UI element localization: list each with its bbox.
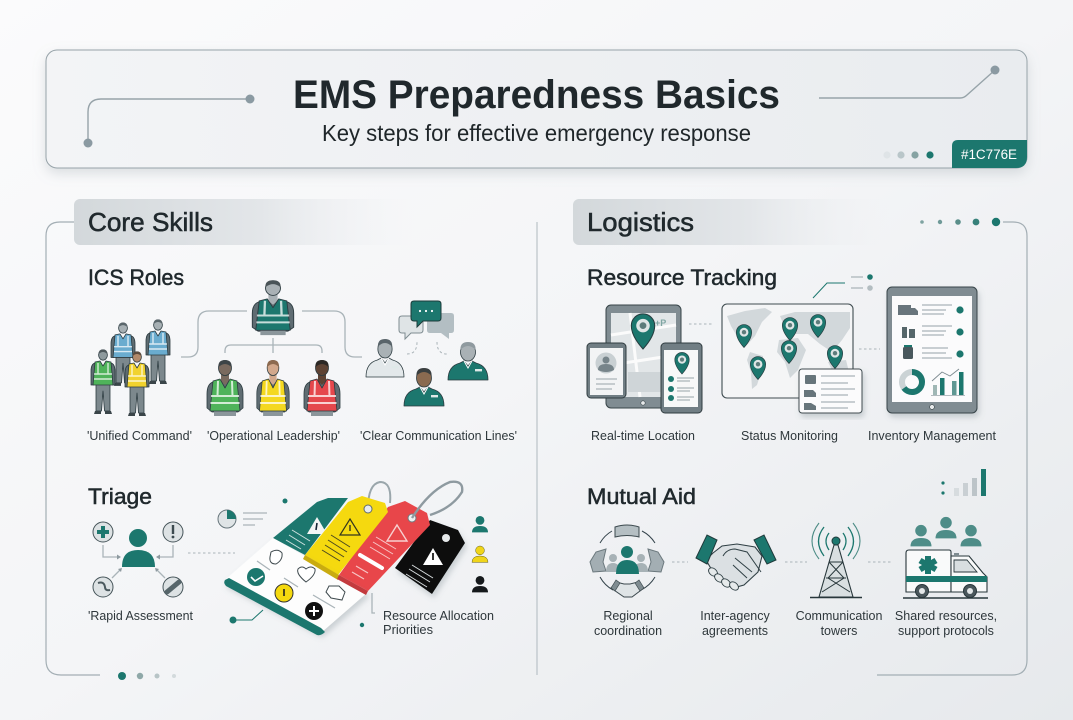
colour tag: #1C776E	[961, 147, 1017, 162]
logistics frame	[877, 222, 1027, 675]
progress dots	[920, 218, 1000, 226]
mutual aid labels: agreements	[702, 624, 768, 638]
status dots	[883, 151, 934, 159]
triage heading: Triage	[88, 484, 152, 509]
donut chart	[902, 372, 922, 392]
core skills heading: Core Skills	[88, 207, 213, 237]
mutual aid labels: Shared resources,	[895, 609, 997, 623]
ICS labels: 'Unified Command'	[87, 429, 192, 443]
inventory rows	[898, 305, 964, 359]
icon: inventory tablet	[887, 287, 977, 413]
mutual aid labels: towers	[821, 624, 857, 638]
continents	[727, 308, 850, 389]
resource labels	[591, 429, 997, 443]
dashed connector	[188, 552, 235, 554]
mutual aid labels: support protocols	[898, 624, 994, 638]
divider	[536, 222, 538, 675]
icon: mini pie with lines	[218, 498, 288, 528]
right phone	[661, 343, 702, 413]
icon: device group	[587, 305, 702, 413]
dashed connector	[868, 561, 892, 563]
header panel	[46, 50, 1027, 168]
triage labels: Resource Allocation	[383, 609, 494, 623]
tag: green	[273, 498, 348, 555]
mutual aid labels: Communication	[796, 609, 882, 623]
central people	[609, 554, 617, 562]
icon: operational leaders	[207, 360, 340, 416]
triage labels: Priorities	[383, 623, 433, 637]
mutual aid labels: Regional	[603, 609, 653, 623]
right circuit line	[819, 66, 1000, 98]
tag: yellow	[305, 496, 388, 575]
dotted connector	[859, 348, 880, 350]
ring: yellow	[368, 482, 390, 509]
dotted connector	[689, 323, 713, 325]
resource labels: Inventory Management	[868, 429, 997, 443]
icon: unified command group	[91, 320, 170, 416]
ICS labels: 'Operational Leadership'	[207, 429, 340, 443]
bar chart	[933, 372, 964, 395]
icon: ambulance and responders	[903, 517, 988, 598]
dashed connector	[672, 561, 688, 563]
icon: incident commander	[252, 280, 294, 335]
left circuit line	[84, 94, 254, 148]
ICS labels: 'Clear Communication Lines'	[360, 429, 517, 443]
mutual aid labels: coordination	[594, 624, 662, 638]
large tablet: +P	[655, 318, 666, 328]
icon: rapid assessment diagram	[93, 522, 183, 597]
logistics heading: Logistics	[587, 207, 694, 237]
status list card	[799, 369, 862, 413]
panel: core skills	[46, 199, 517, 680]
icon: signal bars	[941, 469, 986, 496]
triage labels: 'Rapid Assessment	[88, 609, 194, 623]
dashed connector	[785, 561, 807, 563]
colour tag	[952, 140, 1027, 168]
icon: priority people	[472, 516, 488, 592]
speech bubbles	[399, 301, 454, 354]
side figures	[590, 549, 606, 572]
ring: red	[412, 482, 462, 518]
pagination dots	[118, 672, 176, 680]
callout line with legend	[813, 274, 873, 298]
callout leader	[230, 610, 263, 624]
illustration: triage tags	[224, 482, 465, 635]
icon: communication team	[366, 301, 488, 406]
resource tracking heading: Resource Tracking	[587, 265, 777, 290]
left phone	[587, 343, 626, 398]
ICS heading: ICS Roles	[88, 265, 184, 290]
tag: red	[339, 501, 430, 591]
triage labels	[88, 609, 494, 637]
tag: black	[395, 520, 465, 594]
top figure	[615, 525, 639, 537]
mutual aid heading: Mutual Aid	[587, 484, 696, 509]
card body	[224, 538, 368, 635]
logistics tab	[573, 199, 893, 245]
callout dot and line	[360, 593, 375, 627]
title: EMS Preparedness Basics	[293, 73, 780, 117]
mutual aid labels	[594, 609, 997, 638]
icon: communication tower	[810, 523, 862, 598]
icon: regional coordination	[590, 525, 664, 597]
illustration: world status map	[722, 304, 853, 398]
panel: logistics	[573, 199, 1027, 675]
org connector lines	[181, 311, 362, 357]
ICS labels	[87, 429, 517, 443]
core skills frame	[46, 222, 100, 675]
small handshake	[611, 582, 644, 597]
icon: handshake	[696, 535, 776, 592]
subtitle: Key steps for effective emergency response	[322, 120, 751, 146]
mutual aid labels: Inter-agency	[700, 609, 770, 623]
resource labels: Real-time Location	[591, 429, 695, 443]
core skills tab	[74, 199, 414, 245]
resource labels: Status Monitoring	[741, 429, 838, 443]
